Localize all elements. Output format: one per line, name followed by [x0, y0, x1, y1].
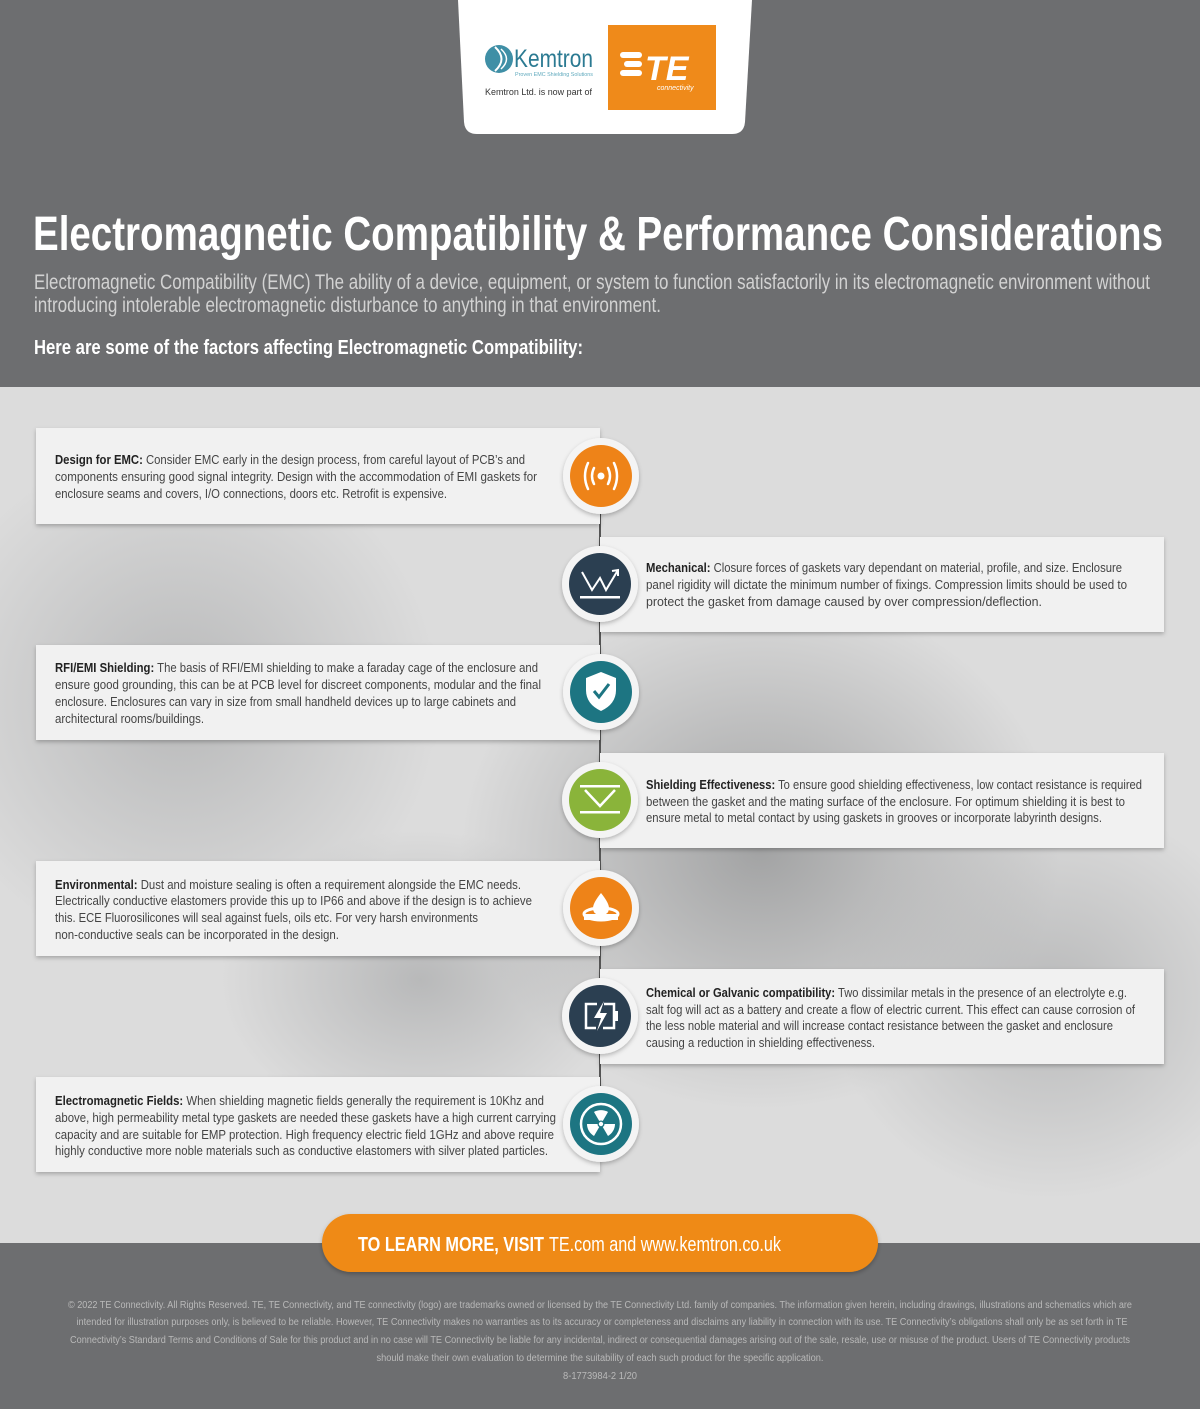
timeline line	[599, 470, 601, 1130]
panel: Environmental: non-conductive seals can be incorporated in the design.	[55, 928, 339, 942]
icon: radiation	[563, 1086, 639, 1162]
icon: gasket groove	[562, 762, 638, 838]
icon: compression	[562, 546, 638, 622]
panel: Mechanical: protect the gasket from damage caused by over compression/deflection.	[646, 595, 1042, 609]
footer legal text: Connectivity’s Standard Terms and Conditions of Sale for this product and in no case will TE Connectivity be liable for any incidental, indirect or consequential damages arising out of the sale, resale, use or misuse of the product. Users of TE Connectivity products	[70, 1335, 1130, 1346]
intro text	[34, 271, 1150, 317]
panel: Environmental: this. ECE Fluorosilicones will seal against fuels, oils etc. For very harsh environments	[55, 911, 478, 925]
TE logo: connectivity	[657, 85, 694, 92]
kemtron logo	[485, 45, 593, 97]
footer legal text: intended for illustration purposes only, is believed to be reliable. However, TE Connectivity makes no warranties as to its accuracy or completeness and disclaims any liability in connection with its use. TE Connectivity’s obligations shall only be as set forth in TE	[76, 1317, 1128, 1328]
panel: Environmental	[36, 861, 639, 956]
icon: shield	[563, 654, 639, 730]
panel: Mechanical	[562, 537, 1164, 632]
panel: Electromagnetic Fields: capacity and are suitable for EMP protection. High frequency electric field 1GHz and above require	[55, 1128, 554, 1142]
panel: Design for EMC	[36, 428, 639, 524]
kemtron logo: Kemtron	[514, 45, 593, 73]
panel: Shielding Effectiveness	[562, 753, 1164, 848]
panel: Environmental: Environmental: Dust and moisture sealing is often a requirement alongside the EMC needs.	[55, 878, 521, 892]
panel: Electromagnetic Fields: above, high permeability metal type gaskets are needed these gaskets have a high current carrying	[55, 1111, 556, 1125]
panel: Chemical or Galvanic compatibility	[562, 969, 1164, 1064]
panel: Shielding Effectiveness: Shielding Effectiveness: To ensure good shielding effectiveness, low contact resistance is required	[646, 778, 1142, 792]
kemtron logo: Kemtron Ltd. is now part of	[485, 87, 592, 97]
body photo background	[0, 387, 1200, 1243]
footer legal text: 8-1773984-2 1/20	[563, 1371, 637, 1382]
footer legal text: should make their own evaluation to determine the suitability of each such product for the specific application.	[376, 1353, 824, 1364]
panel: Electromagnetic Fields: Electromagnetic Fields: When shielding magnetic fields generally the requirement is 10Khz and	[55, 1094, 544, 1108]
panel: Electromagnetic Fields: highly conductive more noble materials such as conductive elastomers with silver plated particles.	[55, 1144, 548, 1158]
call to action button	[322, 1214, 878, 1272]
call to action button: TO LEARN MORE, VISIT	[358, 1234, 544, 1256]
TE logo	[608, 25, 716, 110]
panel: RFI/EMI Shielding: architectural rooms/buildings.	[55, 712, 204, 726]
icon: drop on ring	[563, 870, 639, 946]
panel: Design for EMC: components ensuring good signal integrity. Design with the accommodation of EMI gaskets for	[55, 470, 537, 484]
panel: Chemical or Galvanic compatibility: salt fog will act as a battery and create a flow of electric current. This effect can cause corrosion of	[646, 1003, 1135, 1017]
logo tab	[458, 0, 752, 134]
panel: Shielding Effectiveness: between the gasket and the mating surface of the enclosure. For optimum shielding it is best to	[646, 795, 1125, 809]
header background	[0, 0, 1200, 387]
panel: Mechanical: panel rigidity will dictate the minimum number of fixings. Compression limits should be used to	[646, 578, 1127, 592]
panel: Chemical or Galvanic compatibility: the less noble material and will increase contact resistance between the gasket and enclosure	[646, 1019, 1113, 1033]
subheading: Here are some of the factors affecting Electromagnetic Compatibility:	[34, 337, 583, 359]
kemtron logo: Proven EMC Shielding Solutions	[515, 72, 593, 78]
panel: Chemical or Galvanic compatibility: Chemical or Galvanic compatibility: Two dissimilar metals in the presence of an electrolyte e.g.	[646, 986, 1127, 1000]
icon: signal	[563, 438, 639, 514]
panel: Design for EMC: enclosure seams and covers, I/O connections, doors etc. Retrofit is expensive.	[55, 487, 447, 501]
panel: Shielding Effectiveness: ensure metal to metal contact by using gaskets in grooves or incorporate labyrinth designs.	[646, 811, 1102, 825]
TE logo: TE	[645, 50, 690, 88]
panel: RFI/EMI Shielding: enclosure. Enclosures can vary in size from small handheld devices up to large cabinets and	[55, 695, 516, 709]
footer legal text	[68, 1300, 1132, 1382]
call to action button: TE.com and www.kemtron.co.uk	[549, 1234, 782, 1256]
panel: Chemical or Galvanic compatibility: causing a reduction in shielding effectiveness.	[646, 1036, 875, 1050]
panel: RFI/EMI Shielding: ensure good grounding, this can be at PCB level for discreet components, modular and the final	[55, 678, 541, 692]
footer background	[0, 1243, 1200, 1409]
icon: battery	[562, 978, 638, 1054]
panel: Environmental: Electrically conductive elastomers provide this up to IP66 and above if the design is to achieve	[55, 894, 532, 908]
panel: Mechanical: Mechanical: Closure forces of gaskets vary dependant on material, profile, and size. Enclosure	[646, 561, 1122, 575]
panel: RFI/EMI Shielding: RFI/EMI Shielding: The basis of RFI/EMI shielding to make a faraday cage of the enclosure and	[55, 661, 538, 675]
panel: Design for EMC: Design for EMC: Consider EMC early in the design process, from careful layout of PCB’s and	[55, 453, 525, 467]
intro text: introducing intolerable electromagnetic disturbance to anything in that environment.	[34, 294, 661, 317]
panel: Electromagnetic Fields	[36, 1077, 639, 1172]
panel: RFI/EMI Shielding	[36, 645, 639, 740]
